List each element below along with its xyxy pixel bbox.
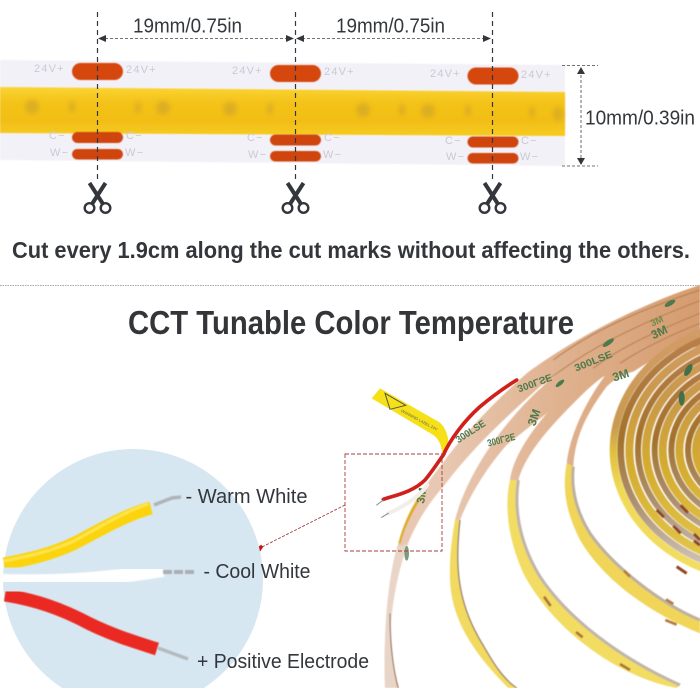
loop 3 xyxy=(507,303,700,688)
wire close-up circle xyxy=(0,449,369,700)
strip labels xyxy=(34,63,552,163)
strip labels: 24V+ xyxy=(232,65,263,77)
strip: yellow COB band xyxy=(0,87,565,136)
strip labels: 24V+ xyxy=(521,69,552,81)
LED strip diagram xyxy=(0,12,565,182)
circle background xyxy=(3,449,263,700)
label: warm white: - Warm White xyxy=(186,486,308,508)
loop 4 xyxy=(564,354,700,634)
dimension: 19mm spacing right: 19mm/0.75in xyxy=(336,16,445,38)
tape printed text: 300LSE xyxy=(454,418,488,446)
wire: positive red xyxy=(5,595,188,659)
tape printed text: 3M xyxy=(649,314,665,328)
strip labels: 24V+ xyxy=(126,64,157,76)
icon: scissors 1 xyxy=(85,183,110,213)
tape layer edges xyxy=(543,290,700,384)
dimension: 19mm spacing left xyxy=(98,16,294,42)
callout arrow xyxy=(255,505,345,552)
tape printed text: 3M xyxy=(649,322,670,342)
cut lines xyxy=(98,12,492,182)
strip labels: 24V+ xyxy=(34,63,65,75)
strip labels: W− xyxy=(50,147,69,159)
strip labels: W− xyxy=(125,147,144,159)
strip labels: W− xyxy=(520,151,539,163)
strip labels: C− xyxy=(247,132,264,144)
dimension: 10mm width: 10mm/0.39in xyxy=(585,108,695,130)
tape printed text: 3M xyxy=(415,487,430,505)
strip labels: C− xyxy=(49,130,66,142)
label: cool white: - Cool White xyxy=(204,561,310,583)
strip labels: C− xyxy=(324,132,341,144)
callout: dashed selection box xyxy=(345,454,442,551)
strip: white PCB xyxy=(0,60,565,166)
wire: warm white yellow xyxy=(4,497,181,564)
icon: scissors 3 xyxy=(480,183,505,213)
warning tag xyxy=(372,388,448,456)
reel coil xyxy=(613,320,700,580)
heading: CCT Tunable Color Temperature xyxy=(128,304,574,341)
LED tape reel photo xyxy=(372,285,700,688)
tape printed text: 300LSE xyxy=(573,349,615,374)
dimension: 19mm spacing left: 19mm/0.75in xyxy=(133,16,242,38)
tape printed text: 3M xyxy=(525,407,544,428)
copper cut pads xyxy=(72,63,518,164)
label: positive electrode: + Positive Electrode xyxy=(197,651,369,673)
strip labels: C− xyxy=(126,130,143,142)
tape printed text: 300LSE xyxy=(486,430,516,448)
loop 2 xyxy=(449,311,680,688)
strip labels: W− xyxy=(446,151,465,163)
strip labels: 24V+ xyxy=(430,68,461,80)
copper marks on coil xyxy=(657,505,700,573)
strip labels: 24V+ xyxy=(324,66,355,78)
tape printed text xyxy=(404,298,694,561)
strip labels: C− xyxy=(445,135,462,147)
wire: cool white xyxy=(0,570,196,581)
strip labels: W− xyxy=(323,149,342,161)
icon: scissors 2 xyxy=(283,183,308,213)
strip labels: C− xyxy=(521,135,538,147)
dimension: 19mm spacing right xyxy=(296,16,491,42)
tape printed text: 300LSE xyxy=(516,371,554,394)
dimension: 10mm width xyxy=(562,66,695,166)
strip labels: W− xyxy=(248,149,267,161)
loop 1 xyxy=(385,285,700,688)
warning tag: WARNING LABEL 24V xyxy=(400,408,439,432)
wires xyxy=(377,380,517,517)
tape printed text: 3M xyxy=(611,366,631,385)
